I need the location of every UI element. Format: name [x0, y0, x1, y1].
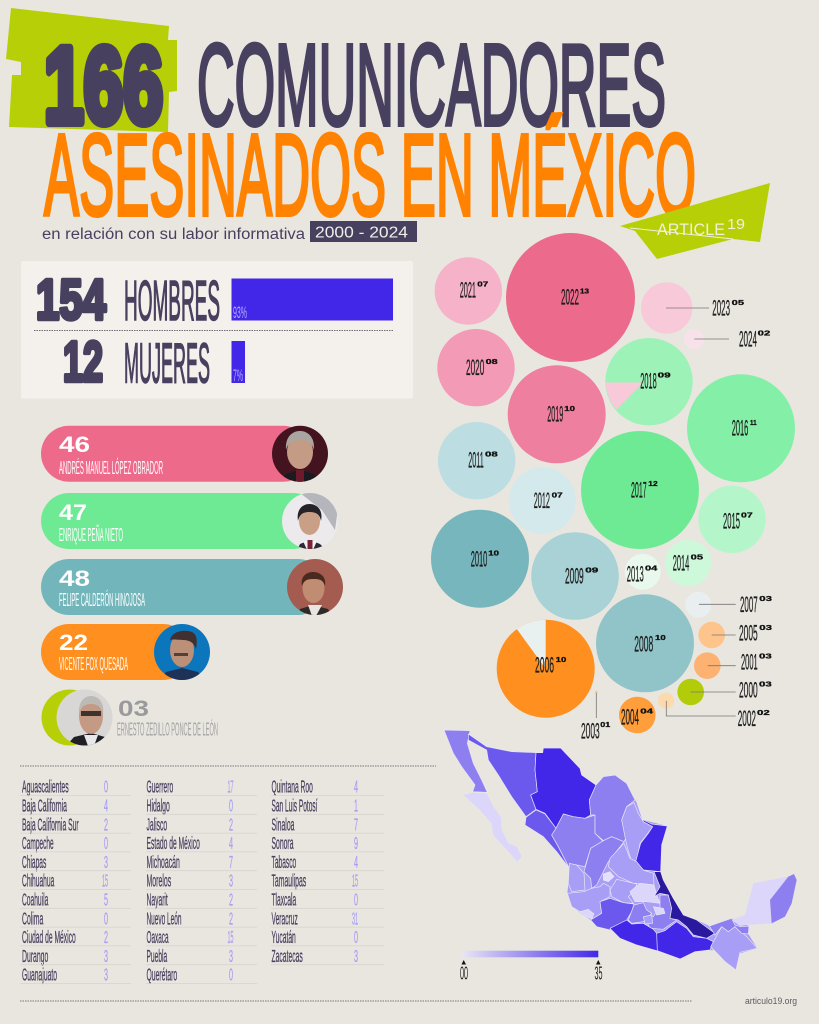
year labels: 09	[658, 371, 671, 380]
year labels: 2018	[640, 368, 657, 393]
table column 3	[271, 777, 384, 966]
table column 1: 4	[104, 796, 108, 816]
table column 1: Colima	[22, 908, 43, 928]
table column 2: 4	[229, 833, 233, 853]
year labels: 03	[759, 651, 772, 660]
date badge	[310, 221, 417, 242]
table column 2: Puebla	[146, 946, 167, 966]
presidents: EPN: 47	[59, 500, 87, 525]
presidents: Calderon	[41, 558, 345, 618]
year labels: 2022	[561, 284, 579, 309]
year labels: 2001	[741, 649, 758, 674]
footer url: articulo19.org	[745, 996, 797, 1007]
presidents: Fox	[41, 622, 212, 682]
presidents: Fox: 22	[59, 630, 88, 655]
presidents: EPN: ENRIQUE PEÑA NIETO	[59, 524, 123, 545]
year labels: 2002	[738, 706, 756, 731]
table column 1: 3	[104, 852, 108, 872]
year labels: 05	[691, 553, 703, 562]
table column 1	[20, 777, 131, 985]
subtitle: en relación con su labor informativa	[42, 226, 305, 243]
table column 2: 15	[228, 927, 234, 947]
logo: Article 19: 19	[727, 216, 745, 233]
table column 3: Tlaxcala	[272, 890, 296, 910]
year labels: 2011	[468, 448, 484, 473]
presidents: AMLO: 46	[59, 432, 90, 457]
table column 3: Tabasco	[272, 852, 296, 872]
table column 1: 2	[104, 814, 108, 834]
table column 2: Hidalgo	[146, 796, 170, 816]
table column 1: 2	[104, 927, 108, 947]
title block	[6, 8, 696, 243]
portrait EPN	[282, 493, 338, 549]
table column 2: Michoacán	[146, 852, 180, 872]
year labels: 2006	[535, 652, 554, 677]
map legend: 00	[460, 963, 468, 983]
table column 1: 5	[104, 890, 108, 910]
orange accent on letter	[552, 112, 564, 127]
panel: gender totals: HOMBRES	[124, 269, 220, 332]
table column 3: Sinaloa	[272, 814, 295, 834]
year labels: 2009	[565, 563, 584, 588]
year labels	[460, 278, 772, 743]
year labels: 03	[759, 594, 772, 603]
women count: 12	[63, 330, 103, 394]
women bar	[232, 341, 245, 383]
choropleth map of Mexico	[444, 730, 797, 970]
table column 2: Estado de México	[146, 833, 200, 853]
leader lines	[596, 308, 736, 718]
text: ERNESTO ZEDILLO PONCE DE LEÓN	[117, 718, 218, 740]
year labels: 2012	[534, 488, 550, 513]
year labels: 07	[741, 510, 753, 519]
table column 1: Coahuila	[22, 890, 48, 910]
year labels: 11	[750, 418, 757, 427]
bubble chart: killings by year	[431, 233, 795, 743]
panel: gender totals: 7%	[233, 366, 243, 385]
panel: gender totals: MUJERES	[124, 332, 210, 394]
table column 1: Chiapas	[22, 852, 46, 872]
map legend	[460, 951, 602, 983]
portrait Calderon	[287, 559, 343, 615]
table column 3: Zacatecas	[272, 946, 303, 966]
presidents: Calderon: FELIPE CALDERÓN HINOJOSA	[59, 589, 145, 610]
table column 3: 4	[354, 852, 358, 872]
panel: gender totals: 93%	[233, 303, 247, 322]
presidents: Calderon: 48	[59, 566, 90, 591]
table column 3: 9	[354, 833, 358, 853]
bubbles Pena Nieto years	[581, 338, 795, 590]
year labels: 10	[488, 549, 499, 558]
table: killings by state	[20, 777, 384, 985]
portrait Fox	[154, 624, 210, 680]
year labels: 2024	[739, 326, 757, 351]
table column 3: 7	[354, 814, 358, 834]
presidents: Zedillo	[42, 688, 218, 748]
year labels: 2008	[634, 631, 653, 656]
table column 3: 0	[354, 927, 358, 947]
table column 1: Guanajuato	[22, 965, 57, 985]
portrait Zedillo	[56, 690, 112, 746]
year labels: 04	[640, 706, 654, 715]
year labels: 2023	[712, 296, 730, 321]
year labels: 10	[655, 633, 666, 642]
table column 2: Guerrero	[146, 777, 173, 797]
table column 1: 3	[104, 946, 108, 966]
table column 3: Yucatán	[272, 927, 296, 947]
table column 2: Jalisco	[146, 814, 167, 834]
year labels: 05	[732, 298, 744, 307]
table column 2: 0	[229, 796, 233, 816]
table column 1: 3	[104, 965, 108, 985]
year labels: 2019	[547, 402, 563, 427]
table column 1: Aguascalientes	[22, 777, 69, 797]
year labels: 2021	[460, 278, 476, 303]
year labels: 2014	[673, 551, 689, 576]
table column 2: 7	[229, 852, 233, 872]
table column 3: 4	[354, 777, 358, 797]
table column 1: Chihuahua	[22, 871, 54, 891]
table column 3: Sonora	[272, 833, 294, 853]
bubbles Calderon years	[431, 422, 711, 692]
year labels: 2017	[631, 477, 647, 502]
year labels: 09	[585, 565, 598, 574]
year labels: 2013	[627, 561, 644, 586]
year labels: 03	[759, 680, 772, 689]
table column 2: Nuevo León	[146, 908, 182, 928]
year labels: 2020	[466, 355, 484, 380]
table column 2: 3	[229, 946, 233, 966]
year labels: 2015	[723, 508, 740, 533]
table column 3: 3	[354, 946, 358, 966]
men count: 154	[36, 268, 106, 332]
logo: Article 19	[620, 183, 770, 259]
year labels: 01	[600, 720, 610, 729]
table column 2: Oaxaca	[146, 927, 169, 947]
year labels: 04	[645, 564, 659, 573]
table column 1: 15	[102, 871, 108, 891]
table column 2: 2	[229, 814, 233, 834]
year labels: 2000	[739, 677, 758, 702]
table column 2: 17	[228, 777, 234, 797]
year labels: 03	[759, 623, 772, 632]
bubbles AMLO years	[435, 233, 704, 463]
table column 3: San Luis Potosí	[272, 796, 318, 816]
table column 3: 31	[352, 908, 358, 928]
presidents: AMLO	[41, 425, 330, 485]
logo: Article 19: ARTICLE	[657, 220, 725, 239]
table column 1: Baja California Sur	[22, 814, 79, 834]
table column 2	[146, 777, 257, 985]
year labels: 2003	[581, 718, 600, 743]
table column 2: Querétaro	[146, 965, 177, 985]
year labels: 08	[486, 357, 498, 366]
year labels: 10	[564, 404, 575, 413]
year labels: 07	[552, 490, 563, 499]
text: 35	[594, 963, 602, 983]
table column 2: Nayarit	[146, 890, 168, 910]
table column 3: 15	[352, 871, 358, 891]
year labels: 2005	[739, 621, 758, 646]
year labels: 13	[580, 286, 589, 296]
year labels: 07	[477, 280, 488, 289]
table column 3: Quintana Roo	[272, 777, 313, 797]
year labels: 2004	[621, 704, 639, 729]
year labels: 10	[556, 655, 566, 664]
presidents: Fox: VICENTE FOX QUESADA	[59, 654, 128, 674]
table column 1: Baja California	[22, 796, 67, 816]
bubbles Fox and Zedillo years	[497, 620, 725, 733]
table column 2: 2	[229, 908, 233, 928]
table column 2: 0	[229, 965, 233, 985]
lime highlight behind 166	[6, 8, 177, 132]
year labels: 2016	[732, 416, 748, 441]
presidents: EPN	[41, 493, 338, 549]
table column 1: Campeche	[22, 833, 54, 853]
presidents: Zedillo: 03	[118, 696, 149, 721]
table column 2: 2	[229, 890, 233, 910]
table column 1: Ciudad de México	[22, 927, 76, 947]
panel: gender totals	[21, 261, 413, 398]
year labels: 2007	[740, 592, 758, 617]
year labels: 12	[648, 479, 658, 488]
table column 3: 0	[354, 890, 358, 910]
table column 3: Tamaulipas	[272, 871, 306, 891]
presidents: AMLO: ANDRÉS MANUEL LÓPEZ OBRADOR	[59, 457, 163, 478]
title number 166: 166	[44, 24, 163, 146]
table column 1: 0	[104, 777, 108, 797]
table column 2: Morelos	[146, 871, 171, 891]
table column 2: 3	[229, 871, 233, 891]
table column 1: 0	[104, 908, 108, 928]
year labels: 08	[485, 450, 498, 459]
men bar	[232, 278, 393, 320]
table column 1: Durango	[22, 946, 48, 966]
table column 3: Veracruz	[272, 908, 298, 928]
table column 3: 1	[354, 796, 358, 816]
date badge: 2000 - 2024	[315, 224, 408, 242]
year labels: 02	[757, 708, 770, 717]
year labels: 02	[758, 329, 770, 338]
table column 1: 0	[104, 833, 108, 853]
portrait AMLO	[272, 426, 328, 482]
year labels: 2010	[471, 547, 487, 572]
